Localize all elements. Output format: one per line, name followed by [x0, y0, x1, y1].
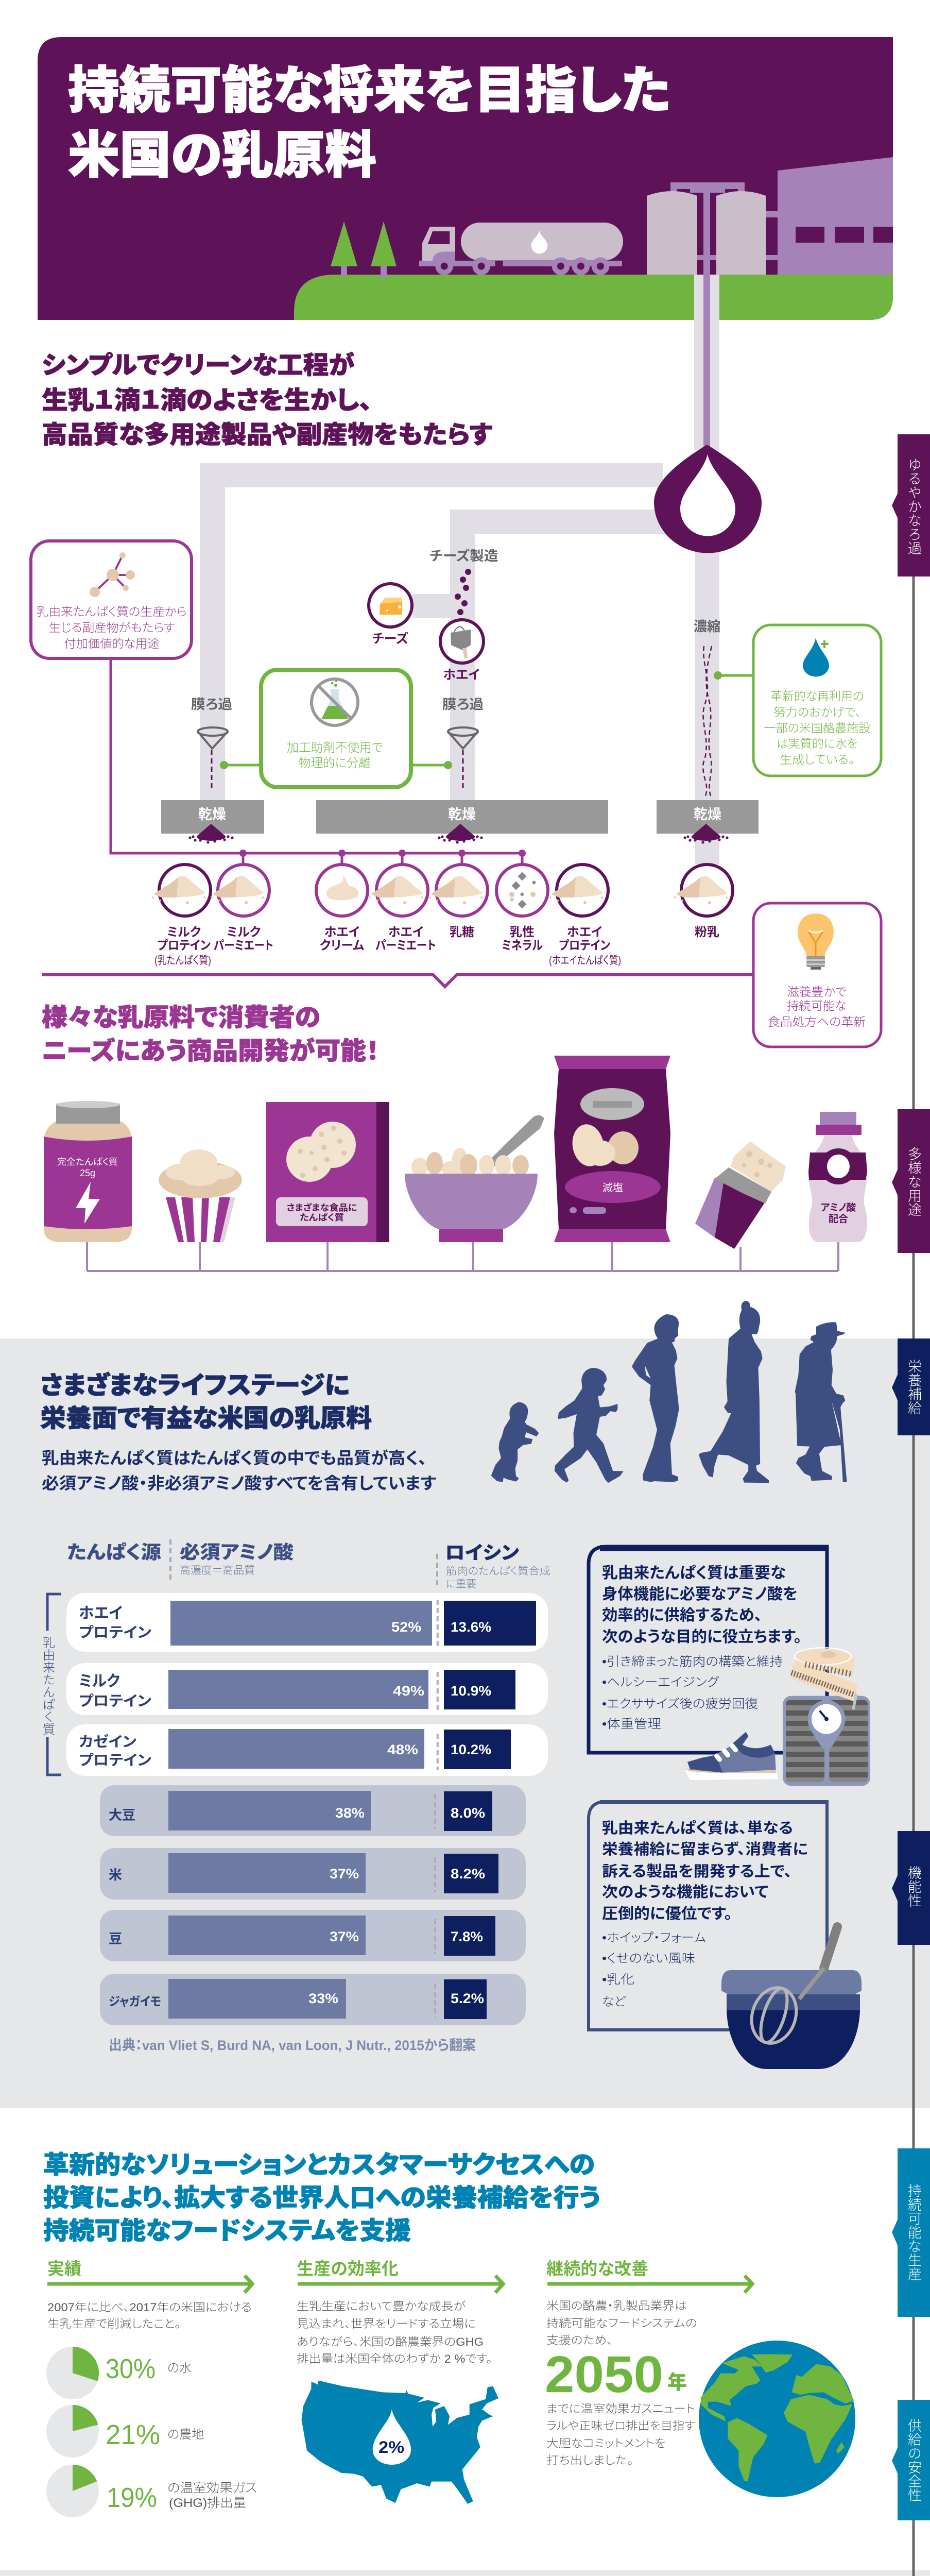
- icon: protein bar: [695, 1141, 786, 1249]
- row: rice: 米: [109, 1867, 122, 1883]
- tab: versatile uses: [892, 1109, 930, 1253]
- panel: nutrition section background: [0, 1338, 930, 2108]
- column headings with arrows: 継続的な改善: [546, 2259, 648, 2278]
- callout text: 努力のおかげで、: [773, 705, 861, 719]
- icon: silos and factory: [647, 157, 893, 275]
- heading: products for consumers: [42, 1004, 379, 1065]
- row: whey: 13.6%: [451, 1619, 491, 1635]
- heading: simple clean process: 高品質な多用途製品や副産物をもたらす: [42, 421, 492, 449]
- callout: body functions: •引き締まった筋肉の構築と維持: [602, 1655, 783, 1669]
- product labels: プロテイン: [559, 939, 610, 953]
- tab: nutrition: 栄養補給: [906, 1359, 922, 1415]
- icon: bathroom scale: [783, 1696, 870, 1786]
- panel: closing section background: [0, 2570, 930, 2576]
- product labels: ミルク: [167, 925, 201, 939]
- tab: supply security: 供給の安全性: [906, 2418, 922, 2502]
- column: continued improvement: ラルや正味ゼロ排出を目指す: [546, 2419, 695, 2432]
- product labels: ホエイ: [324, 925, 359, 939]
- callout text: [37, 605, 187, 650]
- column headings with arrows: [47, 2259, 752, 2293]
- tab: supply security: [892, 2400, 930, 2520]
- stat labels: 30%: [106, 2353, 156, 2384]
- row: whey: プロテイン: [79, 1624, 151, 1640]
- product labels: 乳性: [510, 925, 535, 939]
- callout text: 乳由来たんぱく質の生産から: [37, 605, 187, 618]
- heading: life stages: [40, 1371, 372, 1432]
- tab: gentle filtration: [892, 434, 930, 577]
- table headers: ロイシン: [445, 1542, 519, 1563]
- callout: functionality: 次のような機能において: [602, 1884, 768, 1901]
- row: rice: 8.2%: [451, 1866, 485, 1882]
- column: continued improvement: 大胆なコミットメントを: [546, 2437, 666, 2450]
- product labels: (ホエイたんぱく質): [549, 955, 621, 967]
- text: protein quality note: 乳由来たんぱく質はたんぱく質の中でも品質が高く、: [42, 1449, 427, 1467]
- heading: sustainable food system: [43, 2151, 600, 2245]
- icon: drink bottle: [808, 1112, 867, 1242]
- product labels: (乳たんぱく質): [154, 955, 211, 967]
- callout text: 加工助剤不使用で: [286, 741, 383, 755]
- callout: functionality: •ホイップ・フォーム: [602, 1931, 706, 1945]
- icon: cookie box: たんぱく質: [300, 1213, 344, 1223]
- callout text: [764, 689, 870, 766]
- product labels: パーミエート: [214, 939, 273, 953]
- heading: simple clean process: [42, 351, 492, 449]
- row: soy: 38%: [335, 1805, 365, 1821]
- icon: cookie box: さまざまな食品に: [286, 1202, 357, 1213]
- icon: minerals: [509, 872, 536, 908]
- callout: functionality: など: [602, 1995, 626, 2009]
- callout: body functions: 次のような目的に役立ちます。: [602, 1629, 802, 1646]
- heading: products for consumers: ニーズにあう商品開発が可能！: [42, 1037, 379, 1065]
- product connector lines: [87, 1242, 838, 1271]
- row: milk: 49%: [393, 1683, 424, 1699]
- label: 2 percent: 2%: [378, 2438, 404, 2456]
- product labels: [154, 925, 719, 967]
- pie chart: water 30%: [46, 2347, 99, 2399]
- column: continued improvement: 支援のため、: [546, 2334, 613, 2347]
- product labels: 粉乳: [695, 925, 719, 939]
- stat: 2050: 年: [667, 2372, 687, 2394]
- callout: nutritious formulations: [753, 903, 881, 1047]
- tab: versatile uses: 多様な用途: [906, 1147, 922, 1216]
- row: milk: [66, 1663, 548, 1715]
- product labels: ホエイ: [567, 925, 602, 939]
- icon: molecule: [90, 552, 135, 597]
- drying stations: 乾燥: [198, 807, 226, 822]
- row: potato: [100, 1974, 526, 2025]
- stat labels: 19%: [107, 2482, 157, 2513]
- icon: big milk drop: [654, 445, 762, 553]
- row: soy: [100, 1785, 526, 1836]
- callout text: 生じる副産物がもたらす: [48, 621, 175, 634]
- row: potato: 5.2%: [451, 1991, 484, 2006]
- column: continued improvement: までに温室効果ガスニュート: [546, 2402, 695, 2415]
- callout: by-products: [31, 541, 192, 658]
- callout: functionality: 圧倒的に優位です。: [602, 1905, 732, 1922]
- row: whey: [66, 1593, 548, 1652]
- row: casein: カゼイン: [79, 1734, 136, 1750]
- row: milk: プロテイン: [79, 1693, 151, 1709]
- callout: physical separation: [220, 670, 452, 787]
- product labels: ミネラル: [502, 939, 543, 953]
- process labels: [191, 548, 720, 712]
- row: rice: 37%: [330, 1866, 359, 1882]
- stat labels: (GHG)排出量: [169, 2496, 246, 2510]
- process labels: 膜ろ過: [191, 697, 232, 712]
- icon: life stages silhouettes: [491, 1301, 847, 1483]
- callout text: [768, 985, 866, 1028]
- timeline line on right edge: [865, 577, 914, 2576]
- purple connector line to products: [111, 659, 526, 863]
- table headers: 筋肉のたんぱく質合成: [446, 1565, 550, 1577]
- row: rice: [100, 1848, 526, 1900]
- row: soy: 大豆: [109, 1807, 135, 1823]
- callout text: 物理的に分離: [299, 756, 371, 770]
- callout: functionality: 訴える製品を開発する上で、: [602, 1863, 792, 1880]
- heading: simple clean process: 生乳１滴１滴のよさを生かし、: [42, 387, 372, 414]
- column: continued improvement: 打ち出しました。: [546, 2454, 633, 2467]
- label: cheese: チーズ: [372, 631, 408, 646]
- icon: cereal bowl: [405, 1110, 544, 1242]
- column: achievements: 生乳生産で削減したこと。: [47, 2317, 181, 2330]
- column: achievements: [46, 2301, 257, 2517]
- column: production efficiency: [297, 2300, 498, 2504]
- heading: sustainable food system: 革新的なソリューションとカスタマーサクセスへの: [43, 2151, 595, 2179]
- heading: sustainable food system: 投資により、拡大する世界人口への栄養補給を行う: [43, 2184, 600, 2212]
- callout text: 付加価値的な用途: [64, 637, 160, 650]
- product labels: パーミエート: [375, 939, 436, 953]
- icon: chip bag: [554, 1056, 670, 1242]
- row: casein: 10.2%: [451, 1742, 491, 1757]
- icon: drink bottle: アミノ酸: [821, 1202, 856, 1213]
- callout text: は実質的に水を: [777, 737, 858, 750]
- row: whey: ホエイ: [79, 1605, 123, 1622]
- callout text: 革新的な再利用の: [770, 689, 864, 703]
- callout: body functions: 乳由来たんぱく質は重要な: [602, 1565, 786, 1582]
- callout: functionality: •乳化: [602, 1973, 634, 1987]
- icon: globe: [699, 2341, 855, 2497]
- stat labels: の温室効果ガス: [167, 2481, 257, 2495]
- callout: functionality: [589, 1800, 828, 2030]
- stat labels: の農地: [167, 2428, 204, 2442]
- tab: gentle filtration: ゆるやかなろ過: [906, 457, 921, 555]
- map: USA with drop: [302, 2381, 498, 2504]
- panel: header banner: [38, 37, 893, 320]
- stat: 2050: 2050: [545, 2346, 663, 2403]
- column: production efficiency: 排出量は米国全体のわずか 2 %です。: [297, 2352, 492, 2365]
- tab: functionality: 機能性: [906, 1866, 922, 1907]
- row: potato: 33%: [308, 1991, 338, 2006]
- column headings with arrows: 生産の効率化: [297, 2259, 399, 2278]
- row: casein: プロテイン: [79, 1752, 151, 1768]
- callout text: 滋養豊かで: [787, 985, 847, 998]
- heading: life stages: 栄養面で有益な米国の乳原料: [40, 1405, 372, 1432]
- callout: water reuse: [714, 625, 881, 776]
- icon: wavy concentrate lines: [703, 646, 712, 796]
- icon: shoe: [685, 1732, 778, 1780]
- row: pea: 豆: [109, 1931, 122, 1946]
- product labels: クリーム: [320, 939, 364, 953]
- row: pea: [100, 1910, 526, 1961]
- table headers: [67, 1539, 550, 1590]
- callout text: [286, 741, 383, 770]
- column: continued improvement: 持続可能なフードシステムの: [546, 2317, 697, 2330]
- row: milk: 10.9%: [451, 1683, 491, 1699]
- chart: protein bars: [66, 1593, 548, 2025]
- table headers: 必須アミノ酸: [180, 1541, 294, 1563]
- product circles: [152, 865, 733, 916]
- icon: trees: [331, 222, 397, 278]
- row: casein: [66, 1724, 548, 1776]
- callout: body functions: 身体機能に必要なアミノ酸を: [602, 1586, 798, 1603]
- icon: curd dots: [455, 569, 471, 615]
- title: 米国の乳原料: [68, 127, 376, 183]
- icon: protein bottle: 25g: [80, 1168, 95, 1178]
- icon: protein bottle: 完全たんぱく質: [57, 1157, 118, 1167]
- row: soy: 8.0%: [451, 1805, 485, 1821]
- drying stations: 乾燥: [448, 807, 476, 822]
- callout text: 一部の米国酪農施設: [764, 721, 870, 735]
- icon: water drop plus: [803, 638, 829, 676]
- column headings with arrows: 実績: [47, 2259, 81, 2278]
- pie chart: farmland 21%: [46, 2405, 99, 2458]
- callout text: 生成している。: [780, 753, 855, 766]
- drying stations: 乾燥: [694, 807, 721, 822]
- row: whey: 52%: [391, 1619, 421, 1635]
- icon: scale, tape measure and shoe: [685, 1648, 870, 1786]
- icon: whey circle: [440, 620, 484, 663]
- source note: 出典：van Vliet S, Burd NA, van Loon, J Nutr., 2015から翻案: [109, 2038, 476, 2053]
- column: achievements: 2007年に比べ、2017年の米国における: [47, 2301, 252, 2314]
- heading: life stages: さまざまなライフステージに: [40, 1371, 350, 1399]
- icon: protein bottle: [44, 1101, 132, 1242]
- icon: chip bag: 減塩: [602, 1182, 623, 1194]
- process pipes: [200, 275, 719, 865]
- callout: body functions: [589, 1545, 828, 1753]
- column: production efficiency: 生乳生産において豊かな成長が: [297, 2300, 466, 2313]
- tab: sustainable production: 持続可能な生産: [906, 2183, 922, 2281]
- row: milk: ミルク: [79, 1673, 120, 1690]
- stat labels: の水: [167, 2361, 192, 2375]
- row: potato: ジャガイモ: [109, 1995, 161, 2009]
- column: continued improvement: 米国の酪農・乳製品業界は: [546, 2299, 687, 2312]
- text: protein quality note: [42, 1449, 436, 1493]
- icon: no additives flask: [312, 679, 358, 725]
- icon: milk tanker truck: [419, 223, 623, 275]
- callout: functionality: 栄養補給に留まらず、消費者に: [602, 1841, 808, 1858]
- drying stations: [161, 800, 759, 844]
- row: casein: 48%: [387, 1742, 418, 1757]
- process labels: 膜ろ過: [442, 697, 484, 712]
- heading: products for consumers: 様々な乳原料で消費者の: [42, 1004, 320, 1031]
- product labels: 乳糖: [450, 925, 474, 939]
- table headers: に重要: [446, 1578, 476, 1590]
- product labels: ホエイ: [388, 925, 423, 939]
- product labels: プロテイン: [157, 939, 211, 953]
- icon: muffin: [159, 1149, 242, 1242]
- icon: drink bottle: 配合: [829, 1213, 848, 1225]
- icon: light bulb: [798, 913, 834, 970]
- process labels: 濃縮: [694, 619, 720, 634]
- title: 持続可能な将来を目指した: [68, 62, 670, 118]
- icon: cheese circle: [369, 584, 412, 627]
- callout: functionality: 乳由来たんぱく質は、単なる: [602, 1820, 793, 1837]
- row: pea: 7.8%: [451, 1929, 483, 1944]
- heading: simple clean process: シンプルでクリーンな工程が: [42, 351, 354, 379]
- table headers: 高濃度＝高品質: [180, 1565, 255, 1577]
- callout: body functions: •エクササイズ後の疲労回復: [602, 1697, 758, 1711]
- callout text: 持続可能な: [787, 999, 847, 1012]
- column: continued improvement: [545, 2299, 855, 2497]
- bracket: dairy proteins: [40, 1594, 61, 1775]
- row: pea: 37%: [330, 1929, 359, 1944]
- tab: nutrition: [892, 1338, 930, 1435]
- tab: sustainable production: [892, 2148, 930, 2317]
- icon: tape measure: [791, 1648, 857, 1709]
- callout: functionality: •くせのない風味: [602, 1952, 695, 1965]
- process labels: チーズ製造: [429, 548, 498, 564]
- stat labels: 21%: [106, 2419, 160, 2450]
- icon: cream: [326, 876, 358, 900]
- green hill: [294, 275, 893, 320]
- pie chart: GHG 19%: [46, 2465, 99, 2517]
- callout text: 食品処方への革新: [768, 1015, 866, 1028]
- tab: functionality: [892, 1831, 930, 1945]
- column: production efficiency: ありながら、米国の酪農業界のGHG: [297, 2335, 484, 2348]
- column: production efficiency: 見込まれ、世界をリードする立場に: [297, 2317, 476, 2330]
- label: whey: ホエイ: [443, 668, 480, 682]
- table headers: たんぱく源: [67, 1541, 161, 1563]
- callout: body functions: •体重管理: [602, 1717, 661, 1731]
- callout: body functions: 効率的に供給するため、: [602, 1607, 762, 1624]
- text: protein quality note: 必須アミノ酸・非必須アミノ酸すべてを含有しています: [42, 1474, 436, 1493]
- icon: filters with dashed flow: [198, 727, 478, 791]
- divider with down arrow: [42, 975, 752, 987]
- bracket: dairy proteins: 乳由来たんぱく質: [40, 1636, 55, 1735]
- icon: mixing bowl and whisk: [721, 1927, 862, 2069]
- stat labels: [106, 2353, 257, 2513]
- heading: sustainable food system: 持続可能なフードシステムを支援: [43, 2217, 411, 2245]
- product labels: ミルク: [227, 925, 261, 939]
- title: [68, 62, 670, 183]
- callout: body functions: •ヘルシーエイジング: [602, 1675, 719, 1689]
- icon: cookie box: [266, 1102, 389, 1242]
